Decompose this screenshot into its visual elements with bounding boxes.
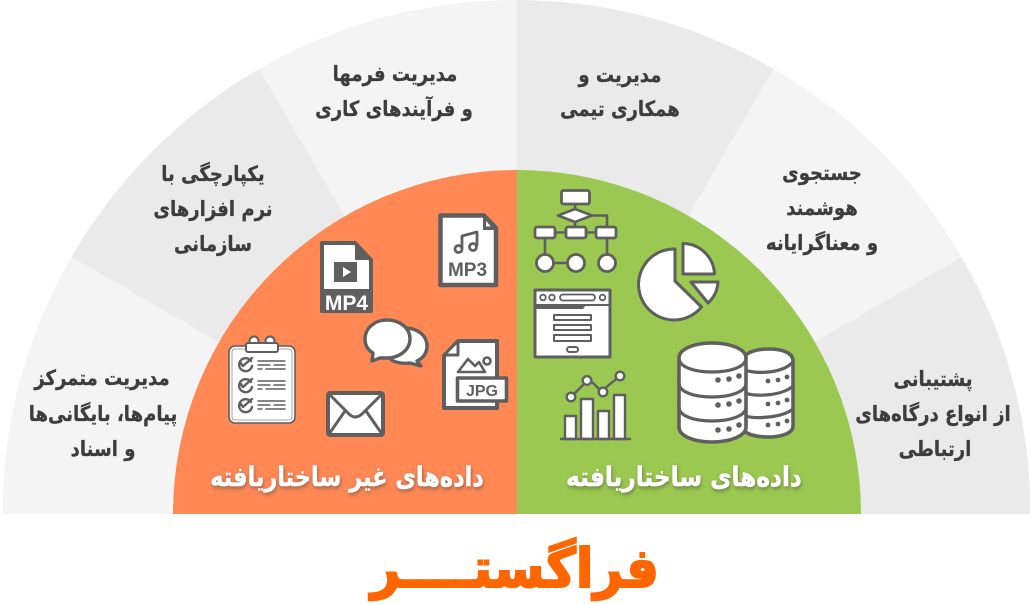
panel: structured data half circle: [517, 170, 861, 514]
panel: outer sector, team collaboration: [516, 0, 774, 514]
text block: smart search: [766, 161, 878, 255]
icon: JPG image file: JPG: [466, 383, 498, 400]
text block: software integration: سازمانی: [174, 232, 252, 256]
text block: channel support: [855, 367, 1011, 461]
text block: software integration: یکپارچگی با: [161, 162, 265, 186]
icon: MP3 file: MP3: [448, 260, 487, 281]
icon: chat bubbles: [365, 320, 427, 366]
heading: structured data: داده‌های ساختاریافته: [566, 461, 802, 492]
text block: channel support: از انواع درگاه‌های: [855, 402, 1011, 426]
icon: JPG image file: [444, 341, 506, 408]
text block: channel support: ارتباطی: [899, 437, 971, 461]
panel: outer sector, smart search: [516, 69, 962, 514]
icon: bar and line chart: [561, 372, 630, 439]
text block: software integration: نرم افزارهای: [153, 197, 273, 221]
text block: team collaboration: همکاری تیمی: [560, 97, 680, 121]
panel: outer sector, centralized messages: [2, 257, 516, 514]
text block: team collaboration: مدیریت و: [577, 63, 661, 87]
text block: smart search: هوشمند: [786, 196, 858, 220]
panel: outer sector, forms and processes: [260, 0, 516, 514]
text block: team collaboration: [560, 63, 680, 121]
text block: centralized messages: [29, 366, 177, 461]
icon: MP4 file: MP4: [325, 292, 368, 315]
text block: smart search: و معناگرایانه: [766, 231, 878, 255]
text block: centralized messages: مدیریت متمرکز: [33, 366, 170, 390]
icon: database servers: [679, 343, 793, 442]
icon: pie chart: [639, 244, 718, 320]
icon: flowchart: [535, 190, 616, 272]
text block: channel support: پشتیبانی: [893, 367, 973, 391]
panel: unstructured data half circle: [173, 170, 517, 514]
text block: forms and processes: و فرآیندهای کاری: [315, 96, 473, 121]
icon: envelope: [328, 393, 383, 435]
icon: MP4 file: [320, 241, 373, 315]
icon: checklist clipboard: [229, 336, 295, 423]
title: brand name: فراگستــــر: [368, 538, 659, 600]
text block: forms and processes: [315, 62, 473, 121]
panel: outer sector, channel support: [516, 257, 1030, 514]
heading: unstructured data: داده‌های غیر ساختاریافته: [210, 461, 484, 494]
panel: outer sector, software integration: [71, 69, 517, 514]
text block: centralized messages: پیام‌ها، بایگانی‌ها: [29, 402, 177, 426]
text block: forms and processes: مدیریت فرمها: [333, 62, 457, 86]
text block: smart search: جستجوی: [782, 161, 862, 185]
icon: web form window: [535, 290, 610, 357]
text block: software integration: [153, 162, 273, 256]
text block: centralized messages: و اسناد: [71, 437, 135, 461]
icon: MP3 file: [440, 214, 498, 285]
